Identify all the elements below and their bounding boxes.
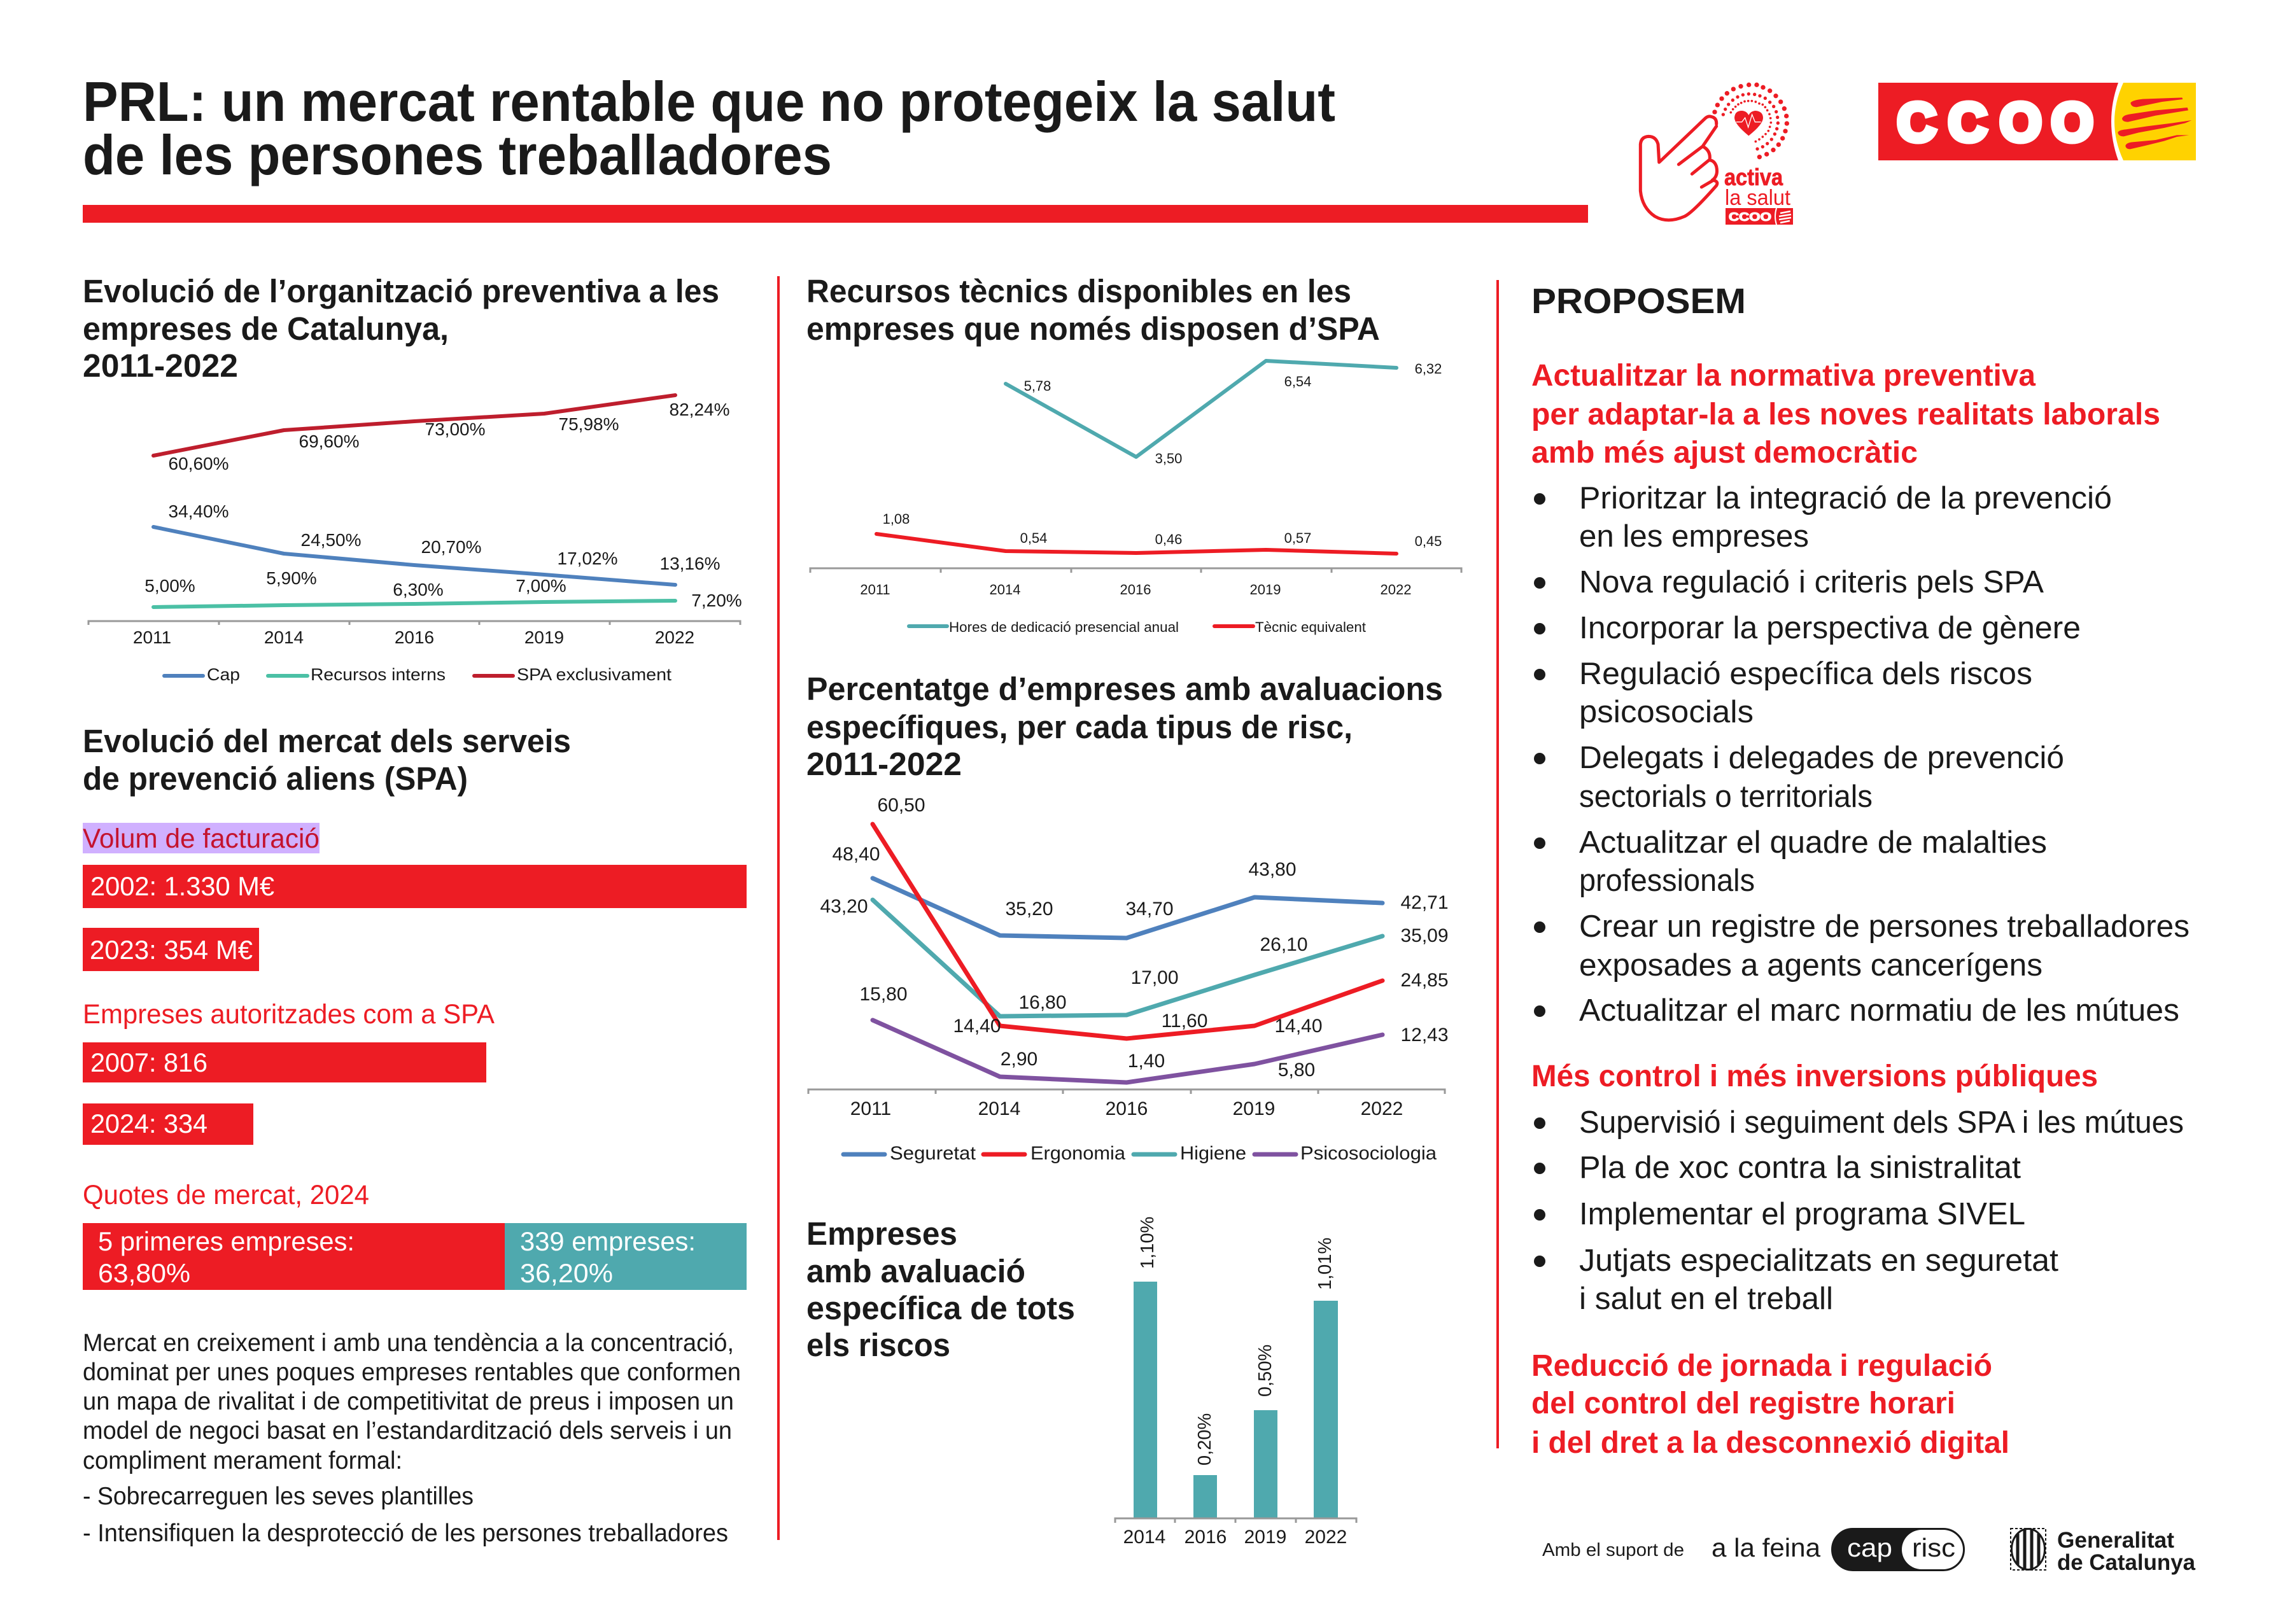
- section heading: recursos tècnics: Recursos tècnics disponibles en les: [806, 273, 1351, 309]
- text block: mercat en creixement: - Sobrecarreguen les seves plantilles: [83, 1483, 474, 1510]
- proposal 1 bullet list: Prioritzar la integració de la prevenció: [1579, 481, 2112, 515]
- section heading: avaluacions específiques: 2011-2022: [806, 746, 962, 782]
- icon: heart: [1734, 111, 1763, 136]
- proposal 2 bullet list: Implementar el programa SIVEL: [1579, 1197, 2025, 1231]
- year labels: [860, 582, 1411, 598]
- bar 2002: 2002: 1.330 M€: [90, 871, 274, 901]
- text block: mercat en creixement: compliment merament formal:: [83, 1447, 402, 1474]
- data labels: 16,80: [1018, 992, 1067, 1013]
- year labels: 2016: [1120, 582, 1151, 598]
- icon: coat of arms: [2011, 1529, 2046, 1570]
- value labels: 1,01%: [1315, 1238, 1335, 1290]
- section heading: avaluacions específiques: Percentatge d’empreses amb avaluacions: [806, 671, 1443, 707]
- data labels: 73,00%: [425, 419, 485, 439]
- proposal 3 heading: i del dret a la desconnexió digital: [1531, 1426, 2009, 1460]
- data labels: 0,54: [1020, 530, 1047, 546]
- data labels: 48,40: [832, 844, 880, 865]
- section heading: mercat SPA: Evolució del mercat dels serveis: [83, 723, 571, 759]
- legend: SPA exclusivament: [517, 665, 672, 684]
- year labels: 2014: [978, 1098, 1020, 1119]
- section heading: avaluació de tots els riscos: amb avaluació: [806, 1253, 1025, 1289]
- proposal 1 bullet list: Actualitzar el quadre de malalties: [1579, 825, 2047, 860]
- section heading: recursos tècnics: empreses que només disposen d’SPA: [806, 311, 1380, 347]
- year labels: 2022: [1361, 1098, 1403, 1119]
- axis: [808, 1089, 1445, 1094]
- proposal 1 bullet list: Incorporar la perspectiva de gènere: [1579, 611, 2081, 645]
- line chart: organització preventiva: [88, 395, 742, 684]
- data labels: 14,40: [953, 1016, 1001, 1037]
- line: hores de dedicació: [1006, 361, 1396, 457]
- axis: [88, 621, 740, 625]
- proposal 1 bullet list: [1534, 481, 2190, 1028]
- logo wordmark: CCOO: [1897, 92, 2093, 152]
- title: PRL: un mercat rentable que no protegeix la salut: [83, 70, 1335, 133]
- legend: [164, 665, 672, 684]
- data labels: 35,20: [1005, 899, 1053, 920]
- text block: mercat en creixement: dominat per unes poques empreses rentables que conformen: [83, 1359, 741, 1386]
- proposal 1 bullet list: sectorials o territorials: [1579, 780, 1873, 814]
- line: Ergonomia: [873, 824, 1382, 1039]
- legend: [909, 619, 1366, 635]
- section heading: avaluació de tots els riscos: els riscos: [806, 1327, 950, 1363]
- proposal 1 bullet list: psicosocials: [1579, 695, 1754, 729]
- line chart: recursos tècnics: [810, 361, 1461, 635]
- footer: amb el suport de: Amb el suport de: [1542, 1540, 1684, 1560]
- logo: activa la salut: [1640, 83, 1793, 225]
- section heading: organització preventiva: empreses de Catalunya,: [83, 311, 449, 347]
- proposal 1 heading: per adaptar-la a les noves realitats laborals: [1531, 398, 2160, 431]
- section heading: organització preventiva: [83, 273, 719, 384]
- icon: dotted pulse arcs: [1712, 83, 1789, 159]
- data labels: [883, 361, 1442, 549]
- logo red field: [1878, 83, 2118, 160]
- proposal 1 bullet list: Actualitzar el marc normatiu de les mútues: [1579, 993, 2179, 1028]
- section heading: avaluacions específiques: [806, 671, 1443, 782]
- legend: Seguretat: [890, 1143, 976, 1164]
- data labels: 1,08: [883, 511, 910, 527]
- data labels: 14,40: [1274, 1016, 1323, 1037]
- data labels: 2,90: [1001, 1049, 1037, 1070]
- logo: Generalitat de Catalunya: Generalitat: [2057, 1528, 2174, 1553]
- legend: [843, 1143, 1437, 1164]
- logo wordmark: activa: activa: [1724, 164, 1783, 190]
- bar 2007: 2007: 816: [90, 1047, 207, 1077]
- data labels: 5,78: [1024, 378, 1051, 394]
- proposal 1 heading: Actualitzar la normativa preventiva: [1531, 359, 2035, 393]
- data labels: [144, 400, 742, 610]
- stacked bar: 339 empreses: 36,20%: [520, 1258, 613, 1288]
- year labels: 2011: [850, 1098, 891, 1119]
- value labels: 0,20%: [1195, 1413, 1215, 1466]
- section heading: avaluació de tots els riscos: específica de tots: [806, 1290, 1075, 1326]
- data labels: 69,60%: [299, 431, 359, 451]
- title red rule: [83, 205, 1588, 223]
- year labels: 2022: [1305, 1527, 1347, 1548]
- data labels: 12,43: [1400, 1025, 1449, 1046]
- proposal 2 bullet list: Jutjats especialitzats en seguretat: [1579, 1243, 2058, 1278]
- text block: mercat en creixement: un mapa de rivalitat i de competitivitat de preus i imposen un: [83, 1388, 734, 1415]
- line: SPA exclusivament: [153, 395, 675, 456]
- proposal 1 bullet list: Delegats i delegades de prevenció: [1579, 741, 2064, 775]
- year labels: [133, 627, 694, 647]
- year labels: 2016: [395, 627, 434, 647]
- data labels: 3,50: [1155, 451, 1182, 466]
- section heading: avaluació de tots els riscos: [806, 1215, 1075, 1363]
- proposal 1 heading: amb més ajust democràtic: [1531, 436, 1918, 470]
- stacked bar: 339 empreses: [505, 1223, 747, 1290]
- data labels: 7,20%: [691, 591, 742, 610]
- year labels: 2014: [264, 627, 304, 647]
- data labels: 7,00%: [516, 576, 566, 596]
- year labels: 2022: [655, 627, 694, 647]
- logo: CCOO: [1878, 83, 2196, 160]
- heading: proposem: PROPOSEM: [1531, 281, 1746, 321]
- panel: empreses autoritzades: [83, 999, 495, 1145]
- data labels: 34,40%: [169, 501, 229, 521]
- data labels: 6,30%: [393, 580, 444, 599]
- legend: Psicosociologia: [1300, 1143, 1437, 1164]
- proposal 1 bullet list: Crear un registre de persones treballadores: [1579, 909, 2190, 944]
- year labels: 2014: [1123, 1527, 1165, 1548]
- proposal 1 bullet list: en les empreses: [1579, 519, 1809, 554]
- value labels: 0,50%: [1255, 1345, 1276, 1397]
- axis: [810, 568, 1461, 573]
- logo: a la feina cap risc: a la feina: [1712, 1533, 1820, 1562]
- bar 2024: [83, 1103, 253, 1145]
- sublabel: Quotes de mercat, 2024: [83, 1180, 369, 1210]
- data labels: 0,46: [1155, 531, 1182, 547]
- proposal 2 bullet list: Supervisió i seguiment dels SPA i les mútues: [1579, 1105, 2184, 1140]
- text block: mercat en creixement: - Intensifiquen la desprotecció de les persones treballadores: [83, 1520, 728, 1547]
- legend: Ergonomia: [1030, 1143, 1125, 1164]
- data labels: 43,20: [820, 896, 868, 917]
- text block: mercat en creixement: [83, 1329, 741, 1547]
- section heading: avaluacions específiques: específiques, per cada tipus de risc,: [806, 709, 1353, 745]
- data labels: 60,50: [877, 795, 925, 816]
- section heading: organització preventiva: Evolució de l’organització preventiva a les: [83, 273, 719, 309]
- logo yellow field: [2114, 83, 2196, 160]
- section heading: mercat SPA: [83, 723, 571, 797]
- line: Seguretat: [873, 878, 1382, 938]
- data labels: 17,00: [1130, 967, 1179, 988]
- data labels: 42,71: [1400, 892, 1449, 913]
- panel: quotes de mercat: [83, 1180, 747, 1290]
- data labels: 5,80: [1278, 1060, 1315, 1081]
- data labels: 34,70: [1125, 899, 1174, 920]
- data labels: 35,09: [1400, 925, 1449, 946]
- value labels: [1137, 1217, 1335, 1466]
- data labels: 43,80: [1248, 859, 1297, 880]
- year labels: 2011: [133, 627, 171, 647]
- proposal 1 bullet list: professionals: [1579, 864, 1755, 898]
- small CCOO mark: [1726, 208, 1793, 225]
- year labels: 2019: [1233, 1098, 1275, 1119]
- bars: [1134, 1282, 1338, 1518]
- data labels: 15,80: [859, 984, 908, 1005]
- data labels: 5,90%: [266, 568, 317, 588]
- proposal 1 heading: [1531, 359, 2160, 470]
- bar chart: avaluació de tots els riscos: [1115, 1217, 1356, 1548]
- data labels: 0,57: [1284, 530, 1311, 546]
- title: de les persones treballadores: [83, 123, 832, 186]
- proposal 2 bullet list: [1534, 1105, 2184, 1316]
- value labels: 1,10%: [1137, 1217, 1158, 1269]
- data labels: 6,32: [1415, 361, 1442, 377]
- text block: mercat en creixement: Mercat en creixement i amb una tendència a la concentració,: [83, 1329, 734, 1357]
- legend: Hores de dedicació presencial anual: [949, 619, 1179, 635]
- logo senyera stripes: [2118, 97, 2191, 149]
- year labels: [1123, 1527, 1347, 1548]
- year labels: 2011: [860, 582, 890, 598]
- proposal 3 heading: del control del registre horari: [1531, 1387, 1955, 1420]
- data labels: 82,24%: [670, 400, 729, 419]
- stacked bar: 5 primeres empreses: 5 primeres empreses:: [98, 1226, 355, 1256]
- sublabel: Empreses autoritzades com a SPA: [83, 999, 495, 1030]
- data labels: 0,45: [1415, 533, 1442, 549]
- bar 2024: 2024: 334: [90, 1109, 207, 1138]
- data labels: 1,40: [1128, 1051, 1165, 1072]
- text block: mercat en creixement: model de negoci basat en l’estandardització dels serveis i un: [83, 1417, 732, 1445]
- line: Recursos interns: [153, 601, 675, 607]
- data labels: 17,02%: [558, 549, 617, 568]
- data labels: 11,60: [1162, 1011, 1207, 1032]
- year labels: 2019: [1244, 1527, 1286, 1548]
- legend: Cap: [207, 665, 240, 684]
- proposal 1 bullet list: exposades a agents cancerígens: [1579, 948, 2042, 983]
- data labels: 60,60%: [169, 454, 229, 473]
- panel: volum de facturació: [83, 823, 747, 971]
- logo: Generalitat de Catalunya: [2011, 1528, 2196, 1575]
- title: [83, 70, 1335, 186]
- bar 2023: [83, 928, 259, 971]
- bar 2007: [83, 1042, 486, 1082]
- data labels: 24,85: [1400, 970, 1449, 991]
- proposal 1 bullet list: Regulació específica dels riscos: [1579, 657, 2032, 691]
- logo: a la feina cap risc: [1712, 1529, 1964, 1571]
- data labels: 13,16%: [660, 554, 720, 573]
- data labels: [820, 795, 1449, 1081]
- year labels: 2019: [524, 627, 564, 647]
- line: Psicosociologia: [873, 1020, 1382, 1082]
- line chart: avaluacions per tipus de risc: [808, 795, 1449, 1164]
- stacked bar: 5 primeres empreses: [83, 1223, 505, 1290]
- line: Higiene: [873, 900, 1382, 1016]
- highlighted sublabel: Volum de facturació: [83, 823, 320, 854]
- logo wordmark: la salut: la salut: [1725, 186, 1791, 210]
- section heading: mercat SPA: de prevenció aliens (SPA): [83, 760, 468, 797]
- icon: hand pointing: [1640, 116, 1717, 220]
- logo: Generalitat de Catalunya: de Catalunya: [2057, 1550, 2196, 1575]
- small CCOO mark: CCOO: [1729, 211, 1771, 223]
- line: Cap: [153, 527, 675, 585]
- year labels: 2022: [1381, 582, 1411, 598]
- stacked bar: 5 primeres empreses: 63,80%: [98, 1258, 190, 1288]
- axis: [1115, 1518, 1356, 1523]
- proposal 2 heading: Més control i més inversions públiques: [1531, 1060, 2098, 1093]
- proposal 3 heading: Reducció de jornada i regulació: [1531, 1349, 1992, 1383]
- data labels: 20,70%: [421, 537, 481, 557]
- proposal 2 bullet list: i salut en el treball: [1579, 1282, 1833, 1316]
- section heading: avaluació de tots els riscos: Empreses: [806, 1215, 957, 1252]
- proposal 3 heading: [1531, 1349, 2009, 1460]
- data labels: 5,00%: [144, 576, 195, 596]
- year labels: 2019: [1250, 582, 1281, 598]
- logo: a la feina cap risc: cap: [1847, 1533, 1892, 1562]
- data labels: 6,54: [1284, 374, 1311, 389]
- proposal 1 bullet list: Nova regulació i criteris pels SPA: [1579, 565, 2044, 599]
- bar 2002: [83, 865, 747, 908]
- year labels: [850, 1098, 1403, 1119]
- year labels: 2016: [1106, 1098, 1148, 1119]
- data labels: 26,10: [1260, 934, 1308, 955]
- year labels: 2016: [1185, 1527, 1227, 1548]
- year labels: 2014: [990, 582, 1020, 598]
- logo: a la feina cap risc: risc: [1912, 1533, 1955, 1562]
- section heading: organització preventiva: 2011-2022: [83, 347, 238, 384]
- bar 2023: 2023: 354 M€: [90, 935, 253, 965]
- proposal 2 bullet list: Pla de xoc contra la sinistralitat: [1579, 1151, 2021, 1185]
- stacked bar: 339 empreses: 339 empreses:: [520, 1226, 696, 1256]
- section heading: recursos tècnics: [806, 273, 1380, 347]
- legend: Tècnic equivalent: [1255, 619, 1366, 635]
- legend: Higiene: [1180, 1143, 1246, 1164]
- line: tècnic equivalent: [876, 534, 1396, 554]
- data labels: 75,98%: [559, 414, 619, 434]
- data labels: 24,50%: [301, 530, 361, 550]
- legend: Recursos interns: [311, 665, 446, 684]
